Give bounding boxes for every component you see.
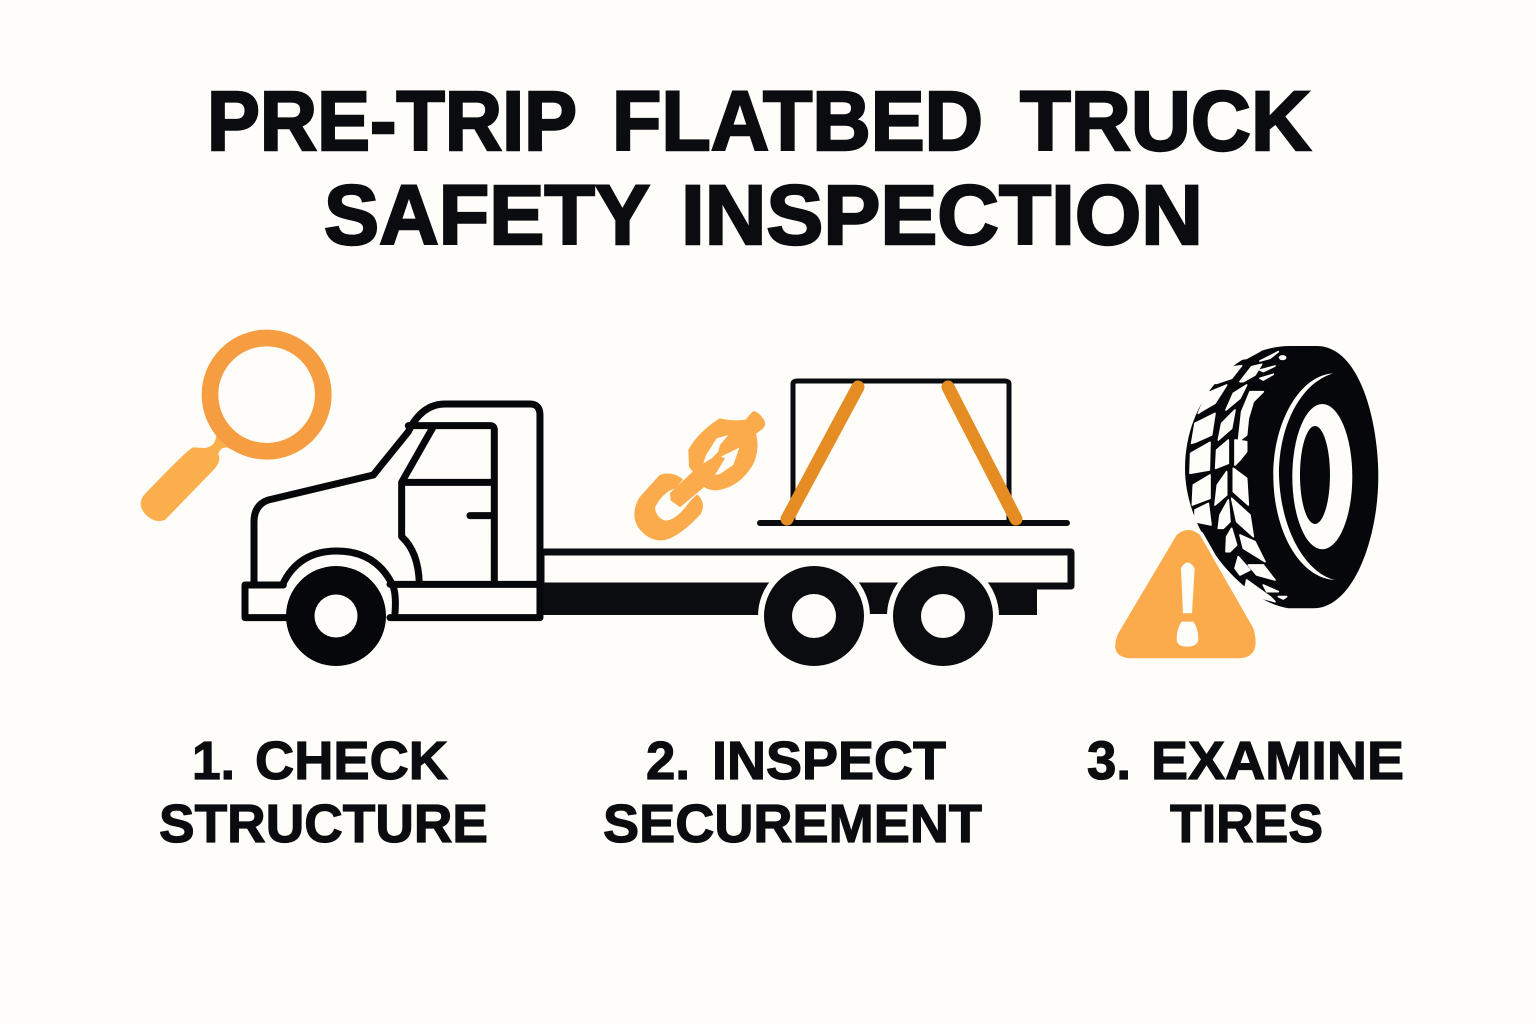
cargo straps <box>787 387 1016 519</box>
truck <box>245 381 1071 669</box>
truck bumper <box>245 584 540 618</box>
title: INSPECTION <box>681 168 1203 262</box>
step 3 label: EXAMINE <box>1151 731 1404 791</box>
step 1 label: 1. <box>192 731 235 791</box>
step 2 label <box>603 731 982 854</box>
step 2 label: 2. <box>646 731 690 791</box>
truck bed <box>541 552 1071 586</box>
step 1 label: STRUCTURE <box>159 794 488 854</box>
icon: chain link <box>635 412 764 539</box>
tire tread <box>1190 351 1287 602</box>
truck cab <box>245 404 540 618</box>
title: PRE-TRIP <box>207 74 577 168</box>
step 2 label: INSPECT <box>712 731 946 791</box>
icon: magnifying glass <box>141 338 323 521</box>
step 1 label <box>159 731 488 854</box>
step 1 label: CHECK <box>255 731 448 791</box>
title: FLATBED <box>612 74 983 168</box>
icon: warning triangle <box>1115 530 1256 658</box>
title <box>207 74 1311 262</box>
step 2 label: SECUREMENT <box>603 794 982 854</box>
step 3 label: TIRES <box>1170 794 1323 854</box>
front wheel arch <box>282 551 395 613</box>
front wheel <box>286 566 386 666</box>
step 3 label: 3. <box>1087 731 1131 791</box>
tire sidewall <box>1273 373 1335 580</box>
rear wheels <box>761 563 996 669</box>
cargo box <box>760 381 1067 523</box>
title: TRUCK <box>1020 74 1311 168</box>
icon: tire <box>1185 346 1378 608</box>
title: SAFETY <box>324 168 650 262</box>
step 3 label <box>1087 731 1404 854</box>
truck chassis <box>541 583 1037 615</box>
truck door and window <box>402 426 494 583</box>
